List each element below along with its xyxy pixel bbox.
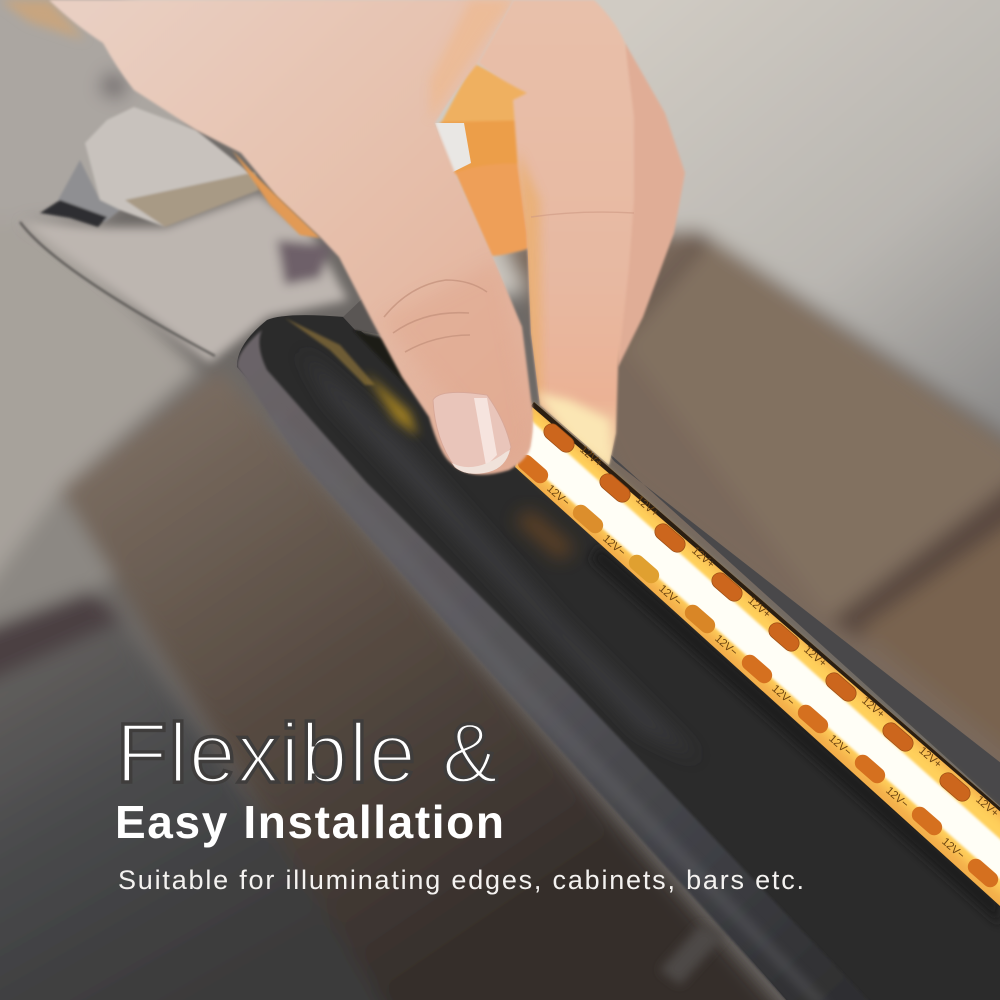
12V+ printed labels: 12V+	[577, 444, 605, 470]
12V- printed labels: 12V−	[600, 533, 628, 559]
subtitle: Suitable for illuminating edges, cabinets, bars etc.	[118, 865, 804, 895]
fingernail	[433, 392, 511, 474]
dark rail profile	[237, 298, 1000, 1000]
12V+ printed labels: 12V+	[859, 695, 887, 721]
crease marks on knuckle	[384, 280, 487, 352]
12V+ printed labels	[577, 444, 1000, 820]
upper row of oval pads	[541, 420, 973, 805]
12V- printed labels: 12V−	[939, 836, 967, 862]
12V+ printed labels: 12V+	[689, 545, 717, 571]
heading: Easy Installation: Easy Installation	[115, 796, 504, 848]
12V- printed labels	[544, 483, 967, 862]
12V- printed labels: 12V−	[712, 633, 740, 659]
12V- printed labels: 12V−	[544, 483, 572, 509]
lower row of oval pads	[515, 451, 1000, 891]
12V+ printed labels: 12V+	[916, 745, 944, 771]
middle finger	[478, 0, 634, 470]
paper tray behind hand	[20, 193, 348, 363]
12V- printed labels: 12V−	[769, 683, 797, 709]
12V+ printed labels: 12V+	[633, 494, 661, 520]
white block between fingers	[435, 123, 471, 173]
12V+ printed labels: 12V+	[745, 595, 773, 621]
glowing COB LED strip	[515, 402, 1000, 915]
index finger and palm with nail	[49, 0, 535, 475]
12V+ printed labels: 12V+	[973, 794, 1000, 820]
12V- printed labels: 12V−	[883, 785, 911, 811]
12V- printed labels: 12V−	[656, 583, 684, 609]
plug cylinder and cable	[20, 107, 259, 356]
orange shadowed inner fingers	[440, 63, 540, 256]
back finger	[610, 43, 685, 367]
title: Flexible &: Flexible &	[116, 706, 498, 800]
12V- printed labels: 12V−	[826, 733, 854, 759]
12V+ printed labels: 12V+	[801, 644, 829, 670]
